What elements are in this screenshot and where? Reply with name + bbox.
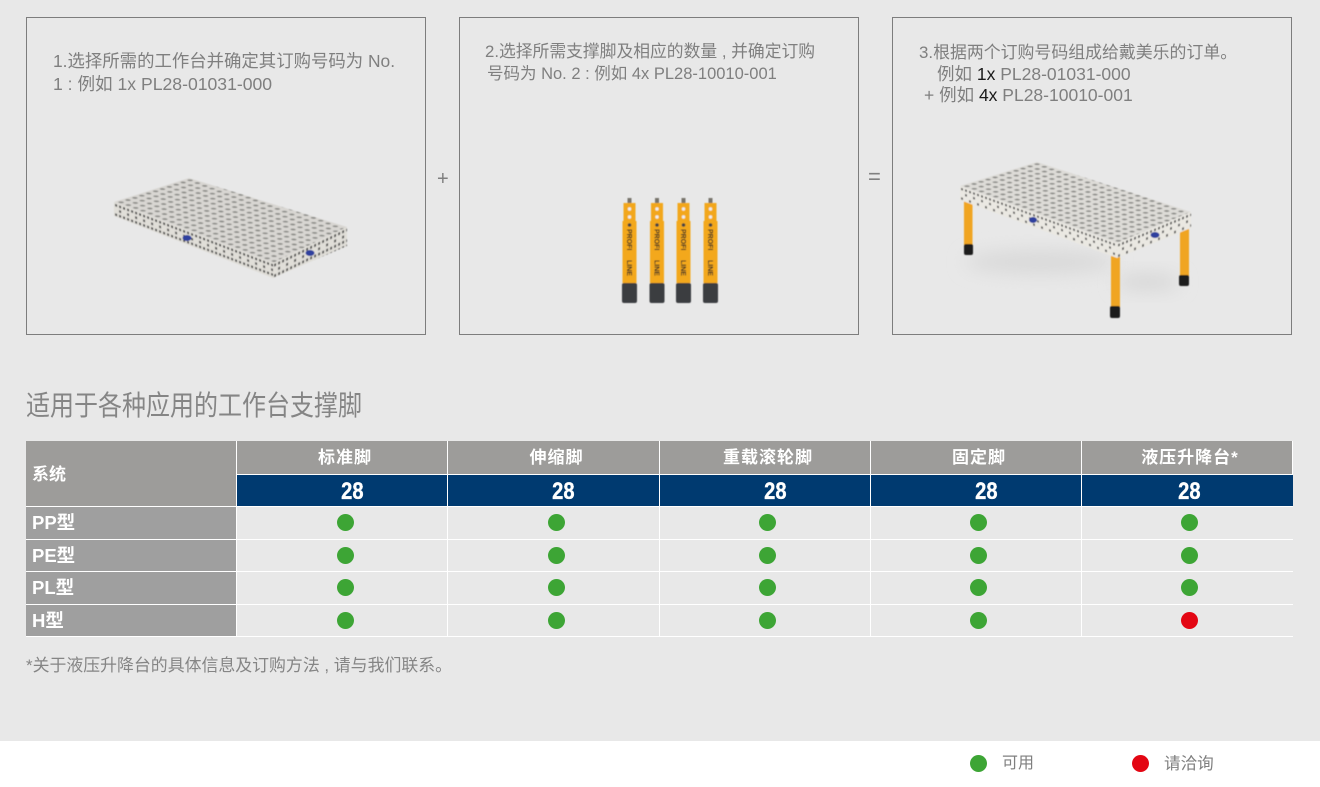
legend: available: 可用 [1002, 755, 1034, 772]
header: fixed leg: 固定脚 [952, 448, 1006, 467]
size 28, column 3 [660, 475, 870, 506]
step 3 text: 例如 1x PL28-01031-000 [937, 64, 1131, 84]
step 3 text: 3.根据两个订购号码组成给戴美乐的订单。 [919, 43, 1237, 62]
size 28, column 1: 28 [341, 478, 363, 504]
legend: please enquire: 请洽询 [1164, 754, 1214, 773]
row label PL: PL型 [32, 577, 74, 598]
panel: step 3 [892, 17, 1292, 335]
panel: step 2 [459, 17, 859, 335]
system header [26, 441, 236, 506]
table row backdrop [26, 441, 1293, 637]
legend: available [970, 755, 1034, 772]
size 28, column 5 [1082, 475, 1293, 506]
plus sign: + [437, 168, 449, 190]
table grid lines [237, 507, 1293, 636]
panel: step 1 [26, 17, 426, 335]
step 2 text [485, 42, 815, 83]
header: telescopic leg [448, 441, 659, 474]
header: standard leg [237, 441, 447, 474]
illustration: four support legs [621, 197, 719, 304]
header: telescopic leg: 伸缩脚 [530, 448, 584, 467]
step 1 text [53, 51, 395, 94]
size 28, column 5: 28 [1178, 478, 1201, 504]
row label H: H型 [32, 610, 64, 630]
header: fixed leg [871, 441, 1081, 474]
step 2 text: 2.选择所需支撑脚及相应的数量 , 并确定订购 [485, 42, 815, 61]
row label H [26, 605, 236, 636]
header: heavy roller leg [660, 441, 870, 474]
legend: please enquire [1132, 754, 1214, 773]
header: heavy roller leg: 重载滚轮脚 [723, 448, 813, 467]
illustration: assembled table with legs [960, 162, 1192, 319]
row label PL [26, 572, 236, 604]
header: hydraulic lift: 液压升降台* [1141, 448, 1239, 467]
heading: 适用于各种应用的工作台支撑脚 [26, 391, 362, 422]
size 28, column 2: 28 [552, 478, 575, 504]
size 28, column 3: 28 [764, 478, 786, 504]
size 28, column 2 [448, 475, 659, 506]
row label PE: PE型 [32, 544, 75, 566]
legend band [0, 741, 1320, 787]
step 3 text: + 例如 4x PL28-10010-001 [924, 85, 1133, 105]
availability dots [337, 514, 1198, 629]
size 28, column 4 [871, 475, 1081, 506]
equals sign: = [868, 164, 881, 189]
step 2 text: 号码为 No. 2 : 例如 4x PL28-10010-001 [487, 65, 777, 83]
header: hydraulic lift [1082, 441, 1292, 474]
step 1 text: 1 : 例如 1x PL28-01031-000 [53, 74, 272, 94]
size 28, column 1 [237, 475, 447, 506]
row label PE [26, 540, 236, 571]
body cells [237, 507, 1293, 636]
step 3 text [919, 43, 1237, 105]
row label PP [26, 507, 236, 539]
row label PP: PP型 [32, 512, 75, 533]
system header: 系统 [32, 465, 66, 484]
illustration: welding table top [114, 178, 348, 278]
header: standard leg: 标准脚 [318, 448, 372, 467]
footnote: *关于液压升降台的具体信息及订购方法 , 请与我们联系。 [26, 656, 452, 675]
size 28, column 4: 28 [975, 478, 997, 504]
step 1 text: 1.选择所需的工作台并确定其订购号码为 No. [53, 51, 395, 71]
